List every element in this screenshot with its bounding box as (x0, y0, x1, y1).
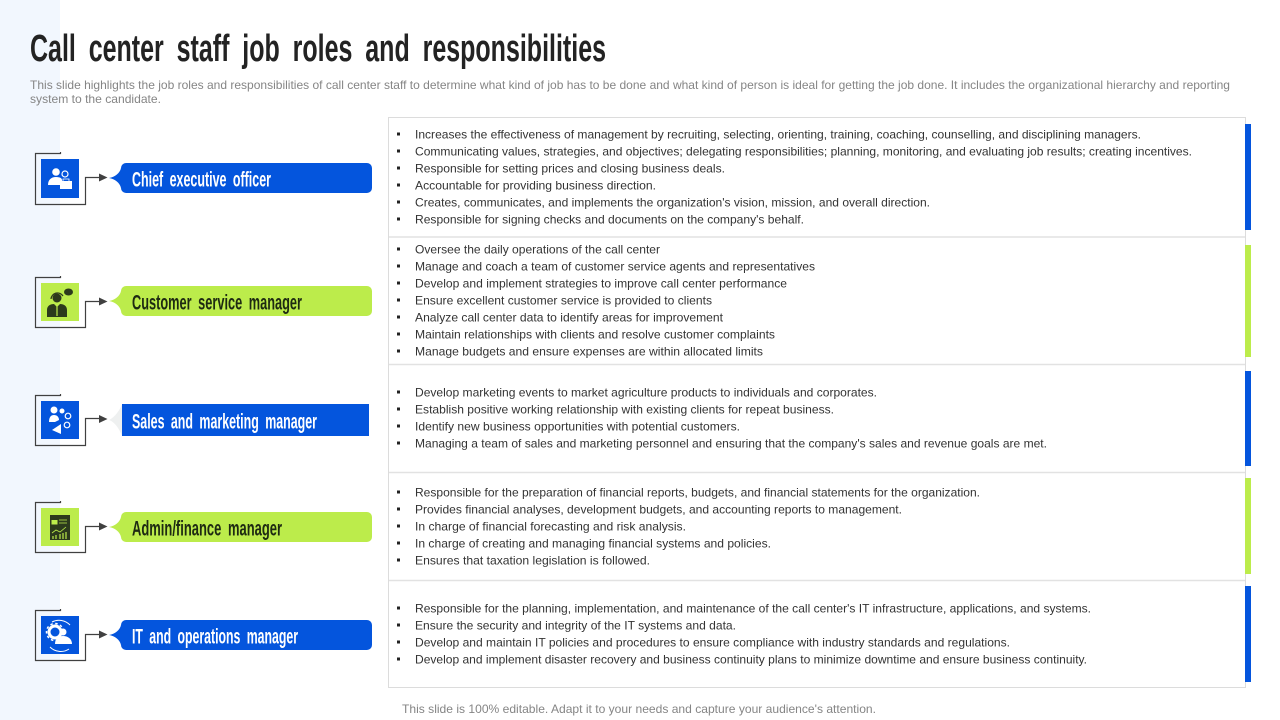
label: IT and operations manager (109, 620, 372, 650)
text block: CEO responsibilities: Creates, communicates, and implements the organization's vision, mission, and overall direction. (415, 196, 930, 210)
accent bar: sales (1245, 371, 1251, 466)
text block: CEO responsibilities: Accountable for providing business direction. (415, 179, 656, 193)
label: customer service manager: Customer service manager (132, 292, 302, 315)
text block: IT responsibilities: Responsible for the planning, implementation, and maintenance of the call center's IT infrastructure, applications, and systems. (415, 602, 1091, 616)
text block: CEO responsibilities: Responsible for signing checks and documents on the company's behalf. (415, 213, 804, 227)
panel: responsibilities table (388, 118, 1251, 688)
text block: sales responsibilities: Develop marketing events to market agriculture products to individuals and corporates. (415, 386, 877, 400)
connector arrow (36, 276, 108, 328)
panel: chief executive officer role (36, 152, 372, 204)
label: admin finance manager: Admin/finance manager (132, 518, 282, 541)
text block: admin responsibilities: Responsible for the preparation of financial reports, budgets, and financial statements for the organization. (415, 486, 980, 500)
label: admin finance manager (109, 512, 372, 542)
panel: sales and marketing manager role (36, 394, 369, 446)
accent bar: customer service (1245, 245, 1251, 357)
text block: CEO responsibilities: Responsible for setting prices and closing business deals. (415, 162, 725, 176)
text block: admin responsibilities (397, 486, 980, 568)
text block: sales responsibilities: Identify new business opportunities with potential customers. (415, 420, 740, 434)
connector arrow (36, 501, 108, 552)
text block: admin responsibilities: Provides financial analyses, development budgets, and accounting reports to management. (415, 503, 902, 517)
connector arrow (36, 609, 108, 660)
text block: customer service responsibilities (397, 243, 815, 359)
text block: IT responsibilities (397, 602, 1091, 667)
label: sales and marketing manager: Sales and marketing manager (132, 411, 317, 434)
icon: marketing megaphone (41, 401, 79, 439)
label: chief executive officer (109, 163, 372, 193)
accent bar: CEO (1245, 124, 1251, 230)
icon: executive with briefcase (41, 159, 79, 198)
text block: customer service responsibilities: Oversee the daily operations of the call center (415, 243, 660, 257)
subtitle text: system to the candidate. (30, 92, 161, 106)
subtitle text: This slide highlights the job roles and responsibilities of call center staff to determine what kind of job has to be done and what kind of person is ideal for getting the job done. It includes the organizational hierarchy and reporting (30, 78, 1230, 92)
text block: sales responsibilities: Managing a team of sales and marketing personnel and ensuring that the company's sales and revenue goals are met. (415, 437, 1047, 451)
accent bar: IT (1245, 586, 1251, 682)
text block: CEO responsibilities: Communicating values, strategies, and objectives; delegating responsibilities; planning, monitoring, and evaluating job results; creating incentives. (415, 145, 1192, 159)
label: customer service manager (109, 286, 372, 316)
text block: IT responsibilities: Develop and implement disaster recovery and business continuity plans to minimize downtime and ensure business continuity. (415, 653, 1087, 667)
text block: admin responsibilities: Ensures that taxation legislation is followed. (415, 554, 650, 568)
text block: customer service responsibilities: Analyze call center data to identify areas for improvement (415, 311, 724, 325)
text block: customer service responsibilities: Develop and implement strategies to improve call center performance (415, 277, 787, 291)
icon: headset agent (41, 283, 79, 321)
text block: customer service responsibilities: Manage budgets and ensure expenses are within allocated limits (415, 345, 763, 359)
label: IT and operations manager: IT and operations manager (132, 626, 298, 649)
panel: admin finance manager role (36, 501, 372, 552)
title: Call center staff job roles and responsibilities (30, 28, 606, 70)
text block: sales responsibilities (397, 386, 1047, 451)
text block: customer service responsibilities: Ensure excellent customer service is provided to clients (415, 294, 712, 308)
connector arrow (36, 394, 108, 446)
subtitle text (30, 78, 1230, 106)
text block: IT responsibilities: Develop and maintain IT policies and procedures to ensure compliance with industry standards and regulations. (415, 636, 1010, 650)
text block: admin responsibilities: In charge of financial forecasting and risk analysis. (415, 520, 686, 534)
text block: CEO responsibilities: Increases the effectiveness of management by recruiting, selecting, orienting, training, coaching, counselling, and disciplining managers. (415, 128, 1141, 142)
text block: admin responsibilities: In charge of creating and managing financial systems and policies. (415, 537, 771, 551)
label: chief executive officer: Chief executive officer (132, 169, 271, 192)
footer note: This slide is 100% editable. Adapt it to your needs and capture your audience's attention. (402, 702, 876, 716)
text block: sales responsibilities: Establish positive working relationship with existing clients for repeat business. (415, 403, 834, 417)
text block: customer service responsibilities: Maintain relationships with clients and resolve customer complaints (415, 328, 775, 342)
text block: IT responsibilities: Ensure the security and integrity of the IT systems and data. (415, 619, 736, 633)
text block: CEO responsibilities (397, 128, 1192, 227)
label: sales and marketing manager (109, 404, 369, 436)
panel: customer service manager role (36, 276, 372, 328)
icon: gear and person (41, 616, 79, 654)
connector arrow (36, 152, 108, 204)
accent bar: admin (1245, 478, 1251, 574)
panel: IT and operations manager role (36, 609, 372, 660)
text block: customer service responsibilities: Manage and coach a team of customer service agents and representatives (415, 260, 815, 274)
icon: financial report (41, 508, 79, 546)
